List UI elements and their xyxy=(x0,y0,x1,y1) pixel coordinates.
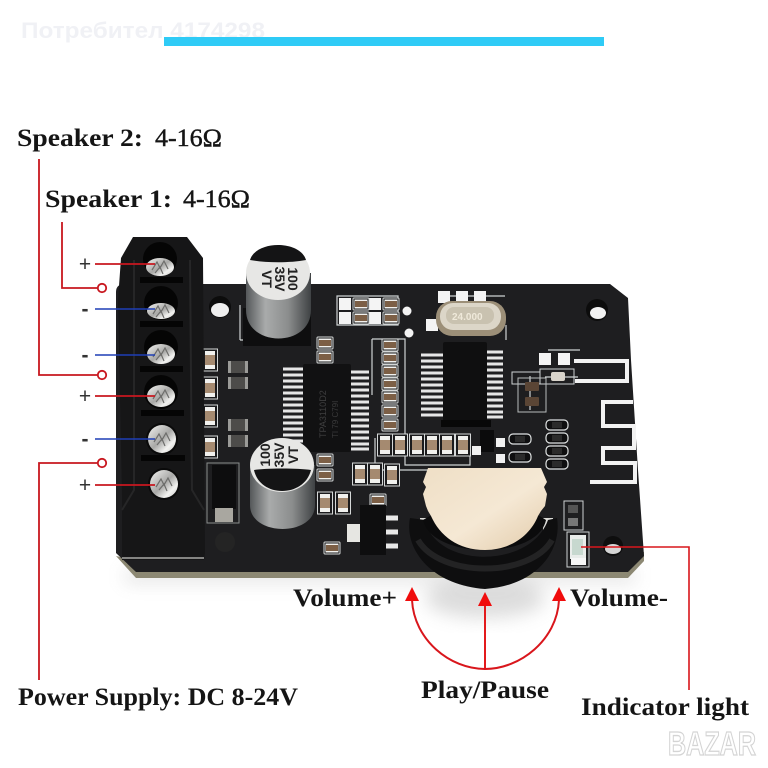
antenna trace xyxy=(574,361,635,482)
diode at lower left xyxy=(207,463,239,523)
leader line: power supply xyxy=(39,459,106,680)
soft shadow beneath board xyxy=(125,570,635,618)
label: Volume+: Volume+ xyxy=(293,585,397,612)
right side parts xyxy=(472,353,574,469)
capacitor: upper xyxy=(243,245,311,346)
label: Play/Pause: Play/Pause xyxy=(421,677,549,704)
polarity markers and wires: + xyxy=(79,385,91,408)
capacitor pairs beside main amplifier xyxy=(317,337,333,481)
capacitor label xyxy=(259,267,301,292)
knob black wheel xyxy=(409,518,558,589)
capacitor label: 35V xyxy=(271,442,287,467)
SMD row below controller xyxy=(378,434,470,456)
capacitor label: 100 xyxy=(285,267,301,291)
callout: Speaker 2 xyxy=(17,125,222,152)
polarity markers and wires: + xyxy=(79,253,91,276)
left column parts xyxy=(202,349,248,458)
terminal housing xyxy=(118,237,205,560)
chip: main amplifier: TPA3110D2 xyxy=(318,390,328,438)
capacitor label: 35V xyxy=(272,267,288,292)
knob metal disc xyxy=(423,468,547,550)
label: Volume-: Volume- xyxy=(570,585,668,612)
indicator LED xyxy=(567,532,589,567)
parts beside indicator xyxy=(564,501,583,530)
SMD column near controller xyxy=(382,339,398,431)
leader line: Speaker 2 xyxy=(39,159,106,379)
leader line: indicator light xyxy=(581,547,689,690)
callout: Speaker 1: Speaker 1: xyxy=(45,186,172,213)
polarity markers and wires: - xyxy=(82,428,88,451)
mounting holes xyxy=(209,296,623,556)
polarity markers and wires: - xyxy=(82,344,88,367)
capacitor label: 100 xyxy=(257,443,273,467)
arrows: knob controls xyxy=(405,587,566,669)
chip: bluetooth controller xyxy=(421,342,503,427)
terminal slots xyxy=(140,277,185,461)
rotary knob xyxy=(409,468,558,589)
capacitor label xyxy=(257,442,301,467)
watermark: user tag: Потребител 4174298 xyxy=(21,18,265,43)
crystal oscillator xyxy=(436,301,506,336)
capacitor label: VT xyxy=(285,446,301,464)
chip: main amplifier xyxy=(283,364,369,452)
voltage regulator xyxy=(347,505,398,555)
SMD groups lower left xyxy=(318,463,400,554)
label: Indicator light: Indicator light xyxy=(581,694,750,721)
screws xyxy=(143,242,180,500)
callout: Speaker 2: 4-16Ω xyxy=(155,125,222,152)
callout: Speaker 1 xyxy=(45,186,250,213)
capacitor label: VT xyxy=(259,270,275,288)
polarity markers and wires xyxy=(79,253,155,497)
knob side pads xyxy=(420,518,553,530)
resistor and capacitor parts: upper pad group xyxy=(339,291,486,338)
board surface xyxy=(116,284,644,572)
screw terminal block xyxy=(118,237,205,560)
polarity markers and wires: + xyxy=(79,474,91,497)
polarity markers and wires: - xyxy=(82,298,88,321)
circuit board xyxy=(116,284,644,589)
chip: main amplifier: TI 79 C79I xyxy=(331,401,340,438)
capacitor: lower xyxy=(250,438,315,529)
crystal oscillator: 24.000 xyxy=(452,312,483,323)
leader line: Speaker 1 xyxy=(62,222,106,292)
top accent bar xyxy=(164,37,604,46)
callout: Speaker 2: Speaker 2: xyxy=(17,125,143,152)
callout: Speaker 1: 4-16Ω xyxy=(183,186,250,213)
component traces and outlines xyxy=(240,296,580,470)
label: Power Supply: Power Supply: DC 8-24V xyxy=(18,684,298,711)
board edge xyxy=(116,552,644,578)
